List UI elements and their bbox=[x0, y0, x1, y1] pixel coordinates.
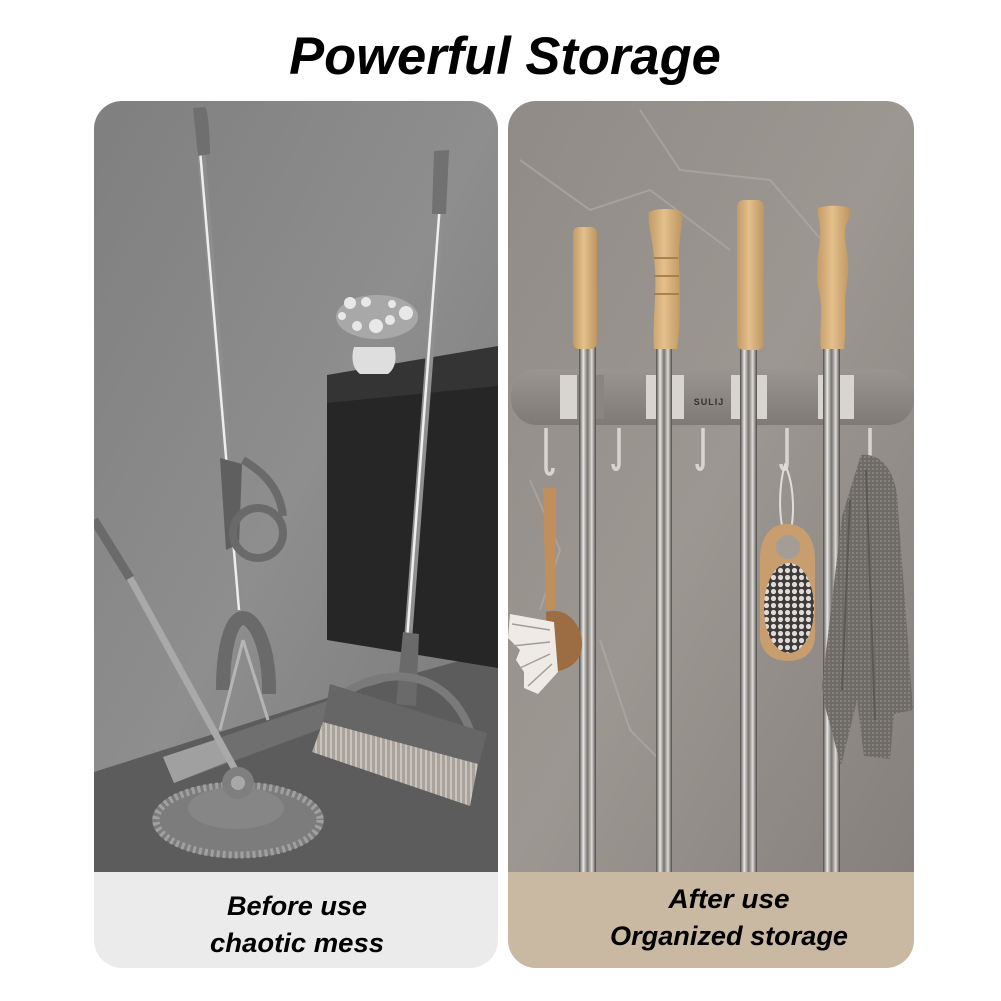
caption text: after use: After use bbox=[667, 884, 790, 914]
wall rack bbox=[511, 375, 914, 425]
title: Powerful Storage bbox=[289, 27, 721, 86]
flower vase bbox=[336, 295, 418, 374]
wall: after use bbox=[508, 101, 914, 872]
rack logo: SULIJ bbox=[694, 397, 724, 407]
hooks bbox=[546, 428, 870, 474]
tool handle 3 bbox=[737, 200, 764, 872]
floor bbox=[94, 650, 498, 872]
panel: before use bbox=[94, 101, 498, 968]
caption background: before use bbox=[94, 872, 498, 968]
broom bbox=[312, 150, 487, 806]
dish brush bbox=[508, 488, 582, 694]
panel: after use bbox=[508, 101, 914, 968]
caption text: organized storage: Organized storage bbox=[610, 921, 848, 951]
caption text: before use: Before use bbox=[227, 891, 367, 921]
wall: before use bbox=[94, 101, 498, 772]
dark cabinet bbox=[327, 346, 498, 668]
tool handle 4 bbox=[817, 206, 850, 872]
towel bbox=[822, 455, 913, 766]
spin mop bbox=[94, 520, 324, 858]
tool handle 1 bbox=[573, 227, 597, 872]
caption background: after use bbox=[508, 872, 914, 968]
caption text: chaotic mess: chaotic mess bbox=[210, 928, 384, 958]
scrub brush bbox=[760, 465, 815, 661]
wall marble veins bbox=[520, 110, 820, 757]
mop: leaning mop with squeeze handle bbox=[163, 107, 337, 783]
tool handle 2 bbox=[649, 209, 682, 872]
